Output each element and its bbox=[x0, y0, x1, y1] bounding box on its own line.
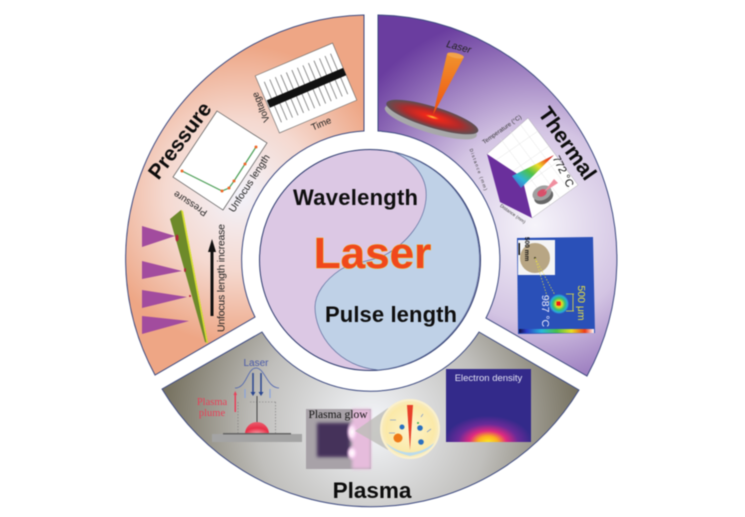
panel: pressure bbox=[126, 15, 364, 375]
chart: electron density bbox=[446, 369, 531, 442]
chart: voltage vs time: Voltage bbox=[250, 90, 273, 124]
arrow: unfocus length increase bbox=[208, 239, 216, 316]
thermal sector background bbox=[378, 15, 617, 376]
illustration: laser plasma plume bbox=[197, 358, 302, 442]
illustration: laser plasma plume: Laser bbox=[243, 358, 269, 369]
chart: 3D temperature map bbox=[469, 115, 578, 225]
illustration: laser heating disc bbox=[382, 39, 481, 146]
panel: plasma bbox=[162, 332, 579, 507]
chart: unfocus length vs pressure: Pressure bbox=[172, 188, 210, 218]
label: pulse length: Pulse length bbox=[325, 302, 457, 327]
label: wavelength: Wavelength bbox=[293, 185, 418, 210]
chart: 3D temperature map: Temperature (°C) bbox=[482, 115, 523, 146]
panel: thermal bbox=[378, 15, 617, 376]
chart: thermal camera map bbox=[517, 237, 595, 334]
heading: Thermal: Thermal bbox=[533, 102, 601, 185]
illustration: laser plasma plume: plume bbox=[199, 408, 225, 419]
chart: thermal camera map: 500 mm bbox=[523, 237, 530, 261]
chart: 3D temperature map: Distance (mm) bbox=[469, 148, 488, 191]
title: Laser: Laser bbox=[314, 229, 431, 278]
chart: thermal camera map: 987 °C bbox=[539, 295, 551, 328]
wavelength lobe bbox=[260, 150, 480, 370]
image: plasma glow bbox=[306, 409, 371, 469]
illustration: laser cones on tilted plate bbox=[142, 210, 208, 343]
chart: 3D temperature map: Distance (mm) bbox=[499, 203, 527, 225]
image: plasma glow: Plasma glow bbox=[308, 409, 368, 421]
illustration: plasma zoom-in circle bbox=[355, 400, 439, 458]
illustration: laser heating disc: Laser bbox=[445, 39, 473, 56]
chart: voltage vs time: Time bbox=[310, 115, 333, 133]
chart: unfocus length vs pressure: Unfocus length bbox=[227, 153, 273, 215]
panel: center yin-yang bbox=[260, 150, 480, 370]
chart: unfocus length vs pressure bbox=[172, 111, 273, 218]
illustration: laser plasma plume: Plasma bbox=[197, 397, 227, 408]
chart: thermal camera map: 500 μm bbox=[575, 285, 587, 321]
pressure sector background bbox=[126, 15, 364, 375]
chart: voltage vs time bbox=[244, 43, 362, 151]
chart: electron density: Electron density bbox=[455, 373, 523, 384]
pulse length lobe bbox=[315, 152, 480, 370]
label: unfocus length increase: Unfocus length increase bbox=[216, 224, 228, 332]
plasma sector background bbox=[162, 332, 579, 507]
chart: 3D temperature map: 772 °C bbox=[550, 154, 576, 189]
heading: Plasma: Plasma bbox=[333, 478, 412, 503]
heading: Pressure: Pressure bbox=[144, 98, 216, 184]
